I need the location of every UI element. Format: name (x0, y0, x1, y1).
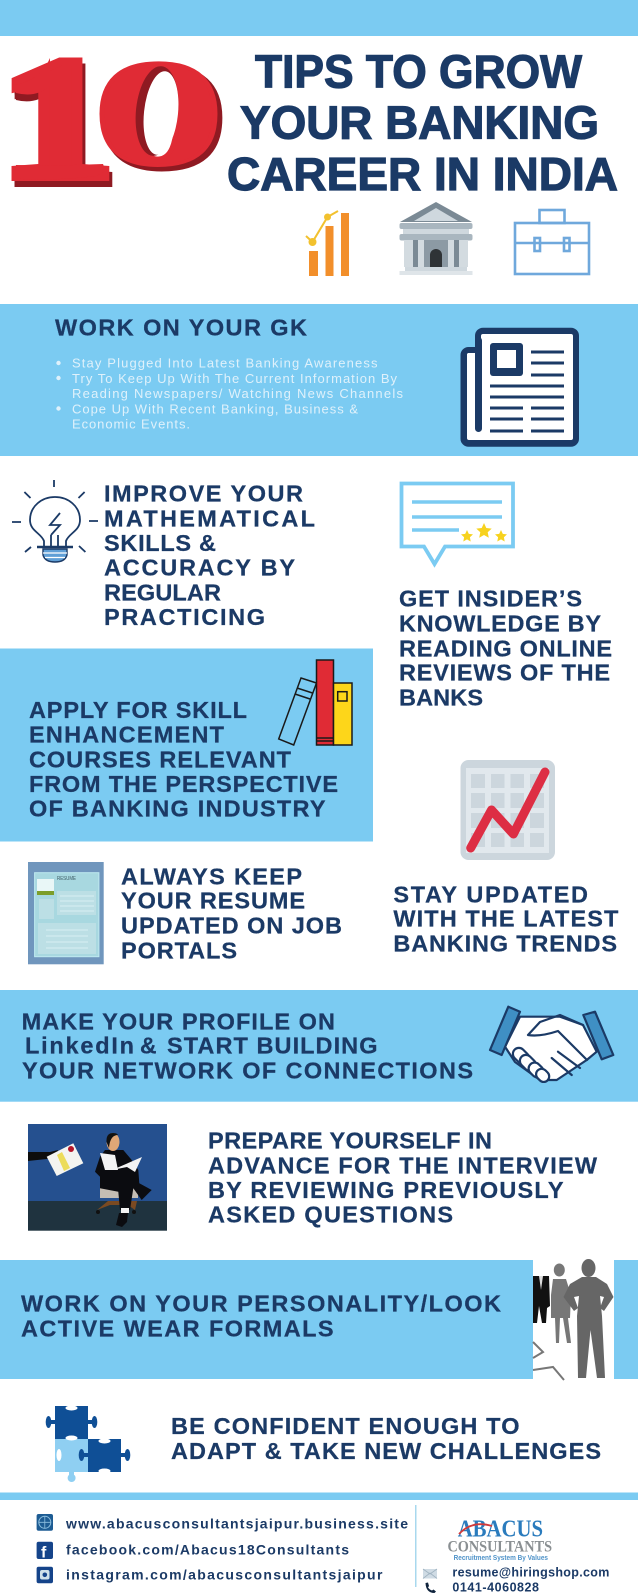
tip: banking trends (393, 881, 619, 957)
logo: Abacus Consultants: ABACUS (458, 1517, 543, 1543)
icon: puzzle pieces (46, 1406, 130, 1482)
tip: keep resume updated: YOUR RESUME (121, 887, 305, 913)
footer: contact details: resume@hiringshop.com (452, 1566, 609, 1580)
panel: linkedin network: START BUILDING (167, 1032, 378, 1058)
panel: personality (0, 1260, 638, 1379)
tip: be confident (171, 1413, 601, 1464)
footer: contact details: 0141-4060828 (452, 1581, 539, 1595)
icon: resume document (28, 862, 104, 964)
panel: work on your GK (0, 304, 638, 456)
big number 10: 0 (92, 29, 225, 197)
panel: personality: ACTIVE WEAR FORMALS (21, 1316, 334, 1342)
big number 10: 0 (96, 33, 229, 201)
bullet list (56, 356, 404, 431)
icon: facebook (37, 1542, 53, 1562)
footer: social links: www.abacusconsultantsjaipur.business.site (65, 1515, 408, 1531)
panel: skill courses: ENHANCEMENT (29, 722, 225, 748)
big number 10: 1 (1, 27, 119, 221)
panel: skill courses: APPLY FOR SKILL (29, 697, 247, 723)
icon: email (423, 1569, 437, 1578)
icon: phone (426, 1582, 436, 1593)
panel: skill courses: COURSES RELEVANT (29, 746, 292, 772)
footer: social links: instagram.com/abacusconsultantsjaipur (66, 1566, 383, 1582)
panel: skill courses: OF BANKING INDUSTRY (29, 796, 326, 822)
icon: trend chart (460, 760, 555, 860)
footer: contact details (423, 1566, 609, 1595)
tip: online reviews: KNOWLEDGE BY (399, 611, 601, 637)
panel: linkedin network: & (140, 1032, 157, 1058)
icon: growth chart (306, 211, 349, 276)
bullet list: Try To Keep Up With The Current Information By (72, 371, 398, 386)
tip: online reviews: GET INSIDER’S (399, 586, 582, 612)
icon: facebook: f (41, 1544, 47, 1562)
icon: books (279, 660, 352, 745)
tip: mathematical skills: IMPROVE YOUR (104, 481, 303, 507)
tip: keep resume updated: PORTALS (121, 937, 237, 963)
tip: interview preparation (208, 1127, 598, 1228)
tip: be confident: BE CONFIDENT ENOUGH TO (171, 1413, 520, 1439)
footer divider (415, 1505, 416, 1587)
icon: instagram (37, 1567, 53, 1583)
icon: newspaper (460, 328, 579, 447)
panel: linkedin network: LinkedIn (25, 1032, 134, 1058)
logo: Abacus Consultants (448, 1517, 552, 1562)
tip: online reviews (399, 586, 612, 711)
tip: interview preparation: ADVANCE FOR THE INTERVIEW (208, 1152, 598, 1178)
icon: handshake (490, 1007, 613, 1084)
title (227, 45, 618, 200)
tip: mathematical skills: REGULAR (104, 580, 221, 606)
tip: interview preparation: PREPARE YOURSELF IN (208, 1127, 492, 1153)
icon: review bubble (402, 484, 513, 564)
title: TIPS TO GROW (255, 45, 583, 97)
icon: resume document: RESUME (57, 876, 77, 882)
bullet list: Economic Events. (72, 416, 190, 431)
tip: be confident: ADAPT & TAKE NEW CHALLENGES (171, 1438, 601, 1464)
tip: banking trends: BANKING TRENDS (393, 931, 617, 957)
tip: online reviews: BANKS (399, 685, 483, 711)
logo: Abacus Consultants: CONSULTANTS (448, 1539, 552, 1556)
icon: briefcase (515, 210, 589, 274)
tip: mathematical skills: MATHEMATICAL (104, 506, 315, 532)
tip: online reviews: READING ONLINE (399, 636, 612, 662)
footer stripe (0, 1492, 638, 1500)
tip: keep resume updated (121, 863, 342, 963)
tip: banking trends: STAY UPDATED (393, 881, 588, 907)
image: interview illustration (28, 1124, 167, 1231)
big number 10: 1 (0, 21, 116, 215)
tip: interview preparation: ASKED QUESTIONS (208, 1202, 453, 1228)
panel: linkedin network: YOUR NETWORK OF CONNECTIONS (22, 1057, 473, 1083)
tip: interview preparation: BY REVIEWING PREVIOUSLY (208, 1177, 564, 1203)
bullet list: Cope Up With Recent Banking, Business & (72, 401, 358, 416)
bullet list: Reading Newspapers/ Watching News Channels (72, 386, 404, 401)
image: business people silhouettes (533, 1259, 614, 1380)
tip: keep resume updated: ALWAYS KEEP (121, 863, 302, 889)
top banner (0, 0, 638, 36)
panel: linkedin network: MAKE YOUR PROFILE ON (22, 1008, 335, 1034)
panel: personality: WORK ON YOUR PERSONALITY/LOOK (21, 1291, 501, 1317)
heading: work on your GK: WORK ON YOUR GK (55, 315, 307, 341)
tip: mathematical skills: PRACTICING (104, 604, 265, 630)
tip: mathematical skills (104, 481, 315, 630)
tip: banking trends: WITH THE LATEST (393, 906, 619, 932)
icon: bank building (400, 202, 472, 275)
footer: social links: facebook.com/Abacus18Consultants (66, 1541, 349, 1557)
icon: website (37, 1514, 53, 1531)
big number 10 (0, 21, 229, 221)
title: YOUR BANKING (240, 96, 599, 148)
panel: skill courses: FROM THE PERSPECTIVE (29, 771, 338, 797)
logo: Abacus Consultants: Recruitment System By Values (454, 1553, 548, 1562)
tip: online reviews: REVIEWS OF THE (399, 660, 610, 686)
tip: mathematical skills: ACCURACY BY (104, 555, 295, 581)
tip: keep resume updated: UPDATED ON JOB (121, 912, 342, 938)
footer: social links (37, 1514, 408, 1583)
title: CAREER IN INDIA (227, 148, 618, 200)
bullet list: Stay Plugged Into Latest Banking Awareness (72, 356, 378, 371)
panel: skill courses (0, 648, 373, 842)
tip: mathematical skills: SKILLS & (104, 530, 216, 556)
panel: linkedin network (0, 990, 638, 1102)
icon: light bulb (12, 480, 98, 562)
